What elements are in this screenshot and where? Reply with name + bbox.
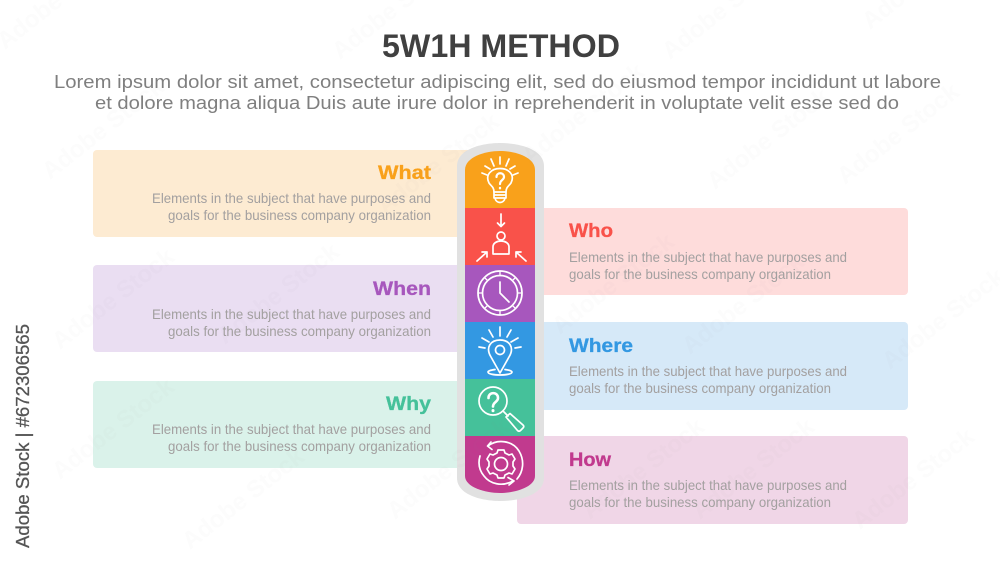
card: How: How [569, 450, 611, 471]
icon: magnifier with question mark [479, 387, 524, 431]
icon: gear with cycle arrows [479, 442, 523, 485]
card: When: When [373, 279, 431, 300]
card: How: Elements in the subject that have purposes and [569, 477, 847, 493]
card: Who: goals for the business company organization [569, 266, 831, 282]
icon: person with inward arrows [477, 214, 526, 261]
card: Where: Elements in the subject that have purposes and [569, 363, 847, 379]
stock watermarks: Adobe Stock [177, 443, 310, 555]
central capsule [457, 143, 544, 501]
card: How [517, 436, 908, 524]
card: Where [517, 322, 908, 410]
stock watermarks: Adobe Stock [517, 58, 650, 170]
card: Who: Who [569, 221, 613, 242]
stock watermarks: Adobe Stock [47, 373, 180, 485]
card: When: goals for the business company organization [168, 323, 431, 339]
icon: clock [478, 271, 522, 315]
stock watermarks: Adobe Stock [382, 413, 515, 525]
card: What [93, 150, 483, 237]
stock watermarks: Adobe Stock [832, 78, 965, 190]
card: Who [517, 208, 908, 295]
card: Why [93, 381, 483, 468]
stock watermarks: Adobe Stock [687, 413, 820, 525]
subtitle text: Lorem ipsum dolor sit amet, consectetur adipiscing elit, sed do eiusmod tempor incididunt ut labore [54, 72, 941, 92]
card: Why: Elements in the subject that have purposes and [152, 421, 431, 437]
card: What: goals for the business company organization [168, 207, 431, 223]
icon: light bulb with question mark [482, 157, 518, 202]
stock watermarks: Adobe Stock [372, 108, 505, 220]
stock watermarks: Adobe Stock [212, 238, 345, 350]
card: Where: Where [569, 336, 633, 357]
card: What: What [378, 163, 432, 184]
card: What: Elements in the subject that have purposes and [152, 190, 431, 206]
stock watermarks: Adobe Stock [677, 248, 810, 360]
card: When [93, 265, 483, 352]
title: 5W1H METHOD [382, 28, 620, 64]
stock watermarks: Adobe Stock [847, 423, 980, 535]
card: Why: Why [386, 394, 431, 415]
stock watermarks: Adobe Stock [577, 413, 710, 525]
card: When: Elements in the subject that have purposes and [152, 306, 431, 322]
stock watermarks: Adobe Stock [37, 73, 170, 185]
watermark credit: Adobe Stock | #672306565 [13, 324, 33, 548]
subtitle text [54, 72, 941, 113]
card: Who: Elements in the subject that have purposes and [569, 249, 847, 265]
stock watermarks: Adobe Stock [47, 243, 180, 355]
stock watermarks: Adobe Stock [702, 83, 835, 195]
card: Where: goals for the business company organization [569, 380, 831, 396]
card: Why: goals for the business company organization [168, 438, 431, 454]
icon: location pin [479, 327, 521, 375]
stock watermarks: Adobe Stock [547, 228, 680, 340]
subtitle text: et dolore magna aliqua Duis aute irure dolor in reprehenderit in voluptate velit esse sed do [95, 93, 899, 113]
card: How: goals for the business company organization [569, 494, 831, 510]
